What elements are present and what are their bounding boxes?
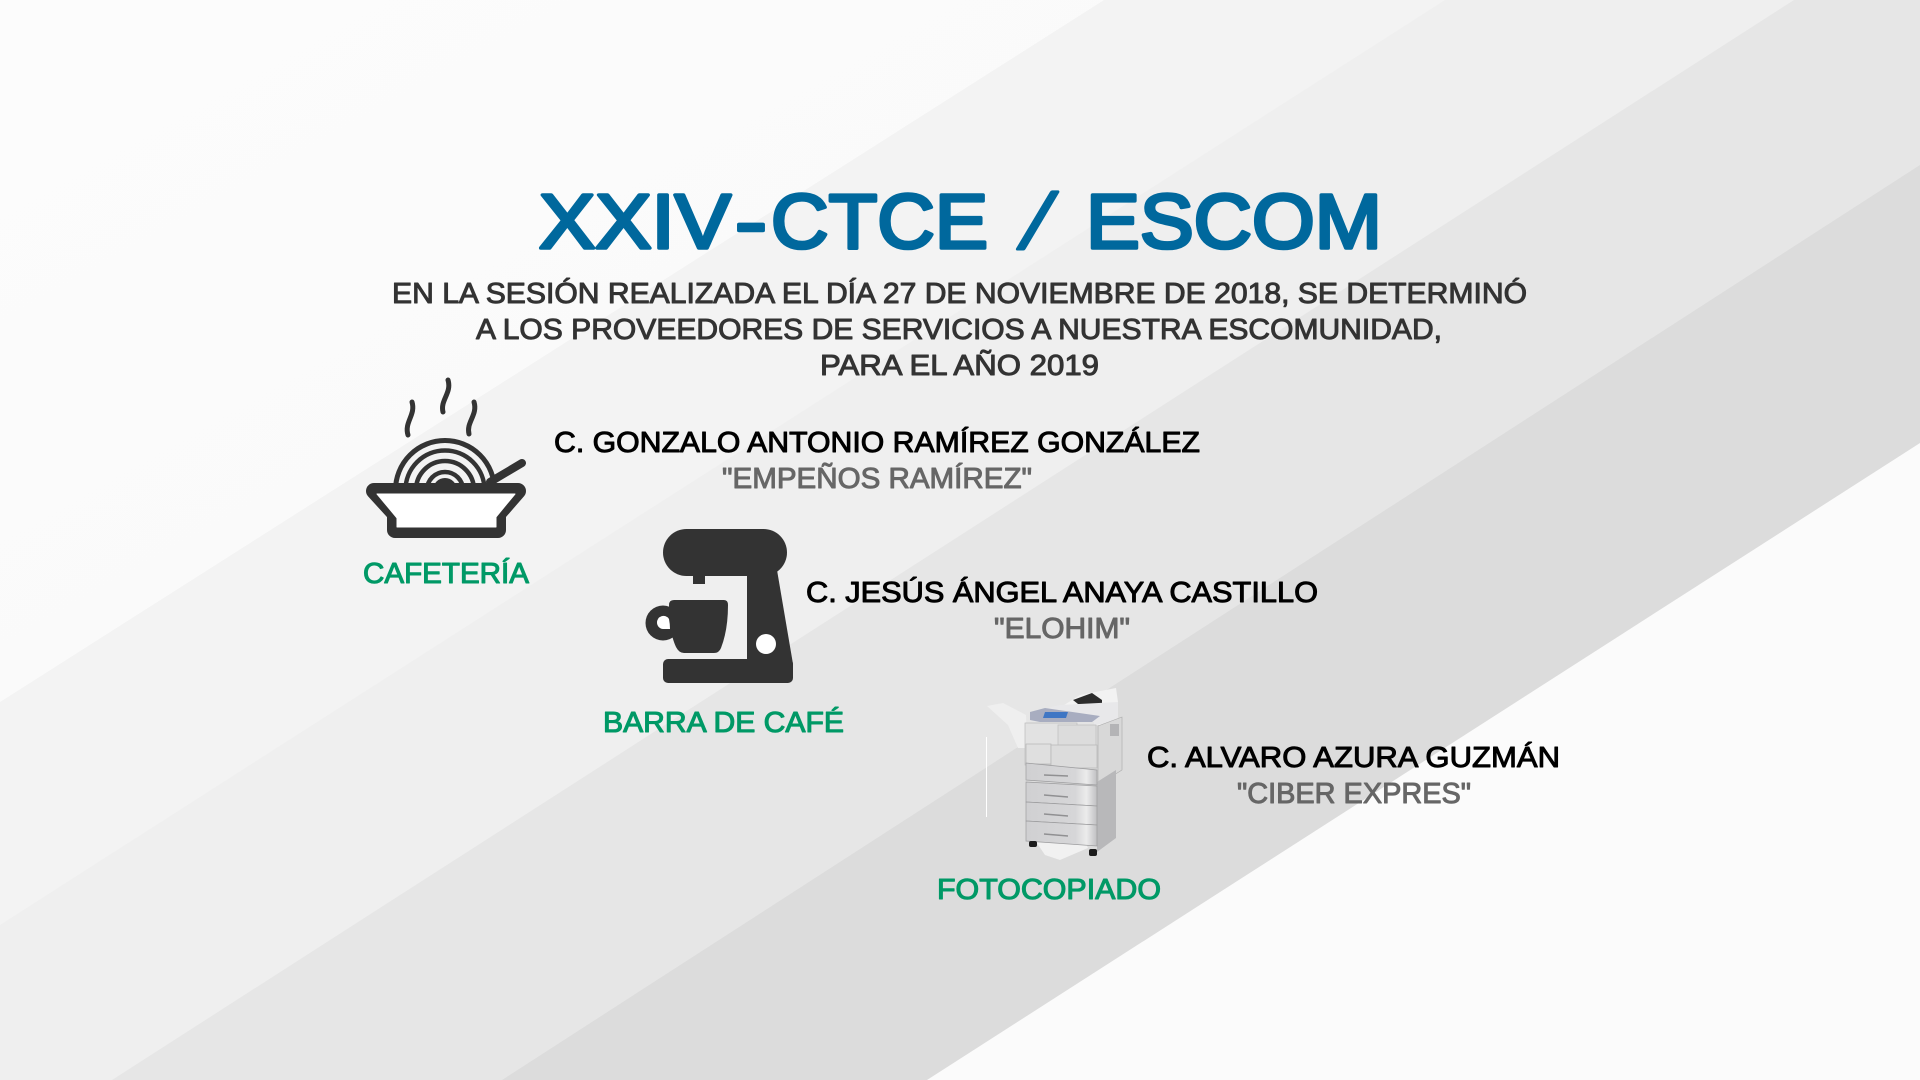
provider: fotocopiado bbox=[937, 688, 1560, 906]
provider name: Alvaro: C. ALVARO AZURA GUZMÁN bbox=[1147, 741, 1560, 774]
icon: noodle bowl bbox=[374, 380, 522, 530]
title: ESCOM bbox=[1086, 179, 1382, 265]
provider: cafetería bbox=[363, 380, 1200, 590]
intro text: A LOS PROVEEDORES DE SERVICIOS A NUESTRA ESCOMUNIDAD, bbox=[476, 314, 1442, 346]
provider name: Jesús: C. JESÚS ÁNGEL ANAYA CASTILLO bbox=[806, 576, 1318, 609]
provider: barra de café bbox=[603, 529, 1318, 739]
label: barra de café: BARRA DE CAFÉ bbox=[603, 706, 844, 739]
business name: Empeños Ramírez: "EMPEÑOS RAMÍREZ" bbox=[722, 461, 1032, 495]
business name: Ciber Expres: "CIBER EXPRES" bbox=[1237, 778, 1471, 810]
intro text bbox=[392, 277, 1527, 382]
icon: photocopier bbox=[986, 688, 1122, 860]
title: / bbox=[1013, 178, 1062, 265]
business name: Elohim: "ELOHIM" bbox=[994, 613, 1130, 645]
title: CTCE bbox=[771, 179, 988, 265]
title bbox=[539, 178, 1382, 265]
label: cafetería: CAFETERÍA bbox=[363, 557, 530, 590]
intro text: EN LA SESIÓN REALIZADA EL DÍA 27 DE NOVIEMBRE DE 2018, SE DETERMINÓ bbox=[392, 277, 1527, 310]
provider name: Gonzalo: C. GONZALO ANTONIO RAMÍREZ GONZÁLEZ bbox=[554, 426, 1200, 459]
icon: coffee machine bbox=[646, 529, 793, 683]
intro text: PARA EL AÑO 2019 bbox=[820, 348, 1099, 382]
title: - bbox=[735, 179, 767, 265]
label: fotocopiado: FOTOCOPIADO bbox=[937, 874, 1161, 906]
title: XXIV bbox=[539, 179, 732, 265]
